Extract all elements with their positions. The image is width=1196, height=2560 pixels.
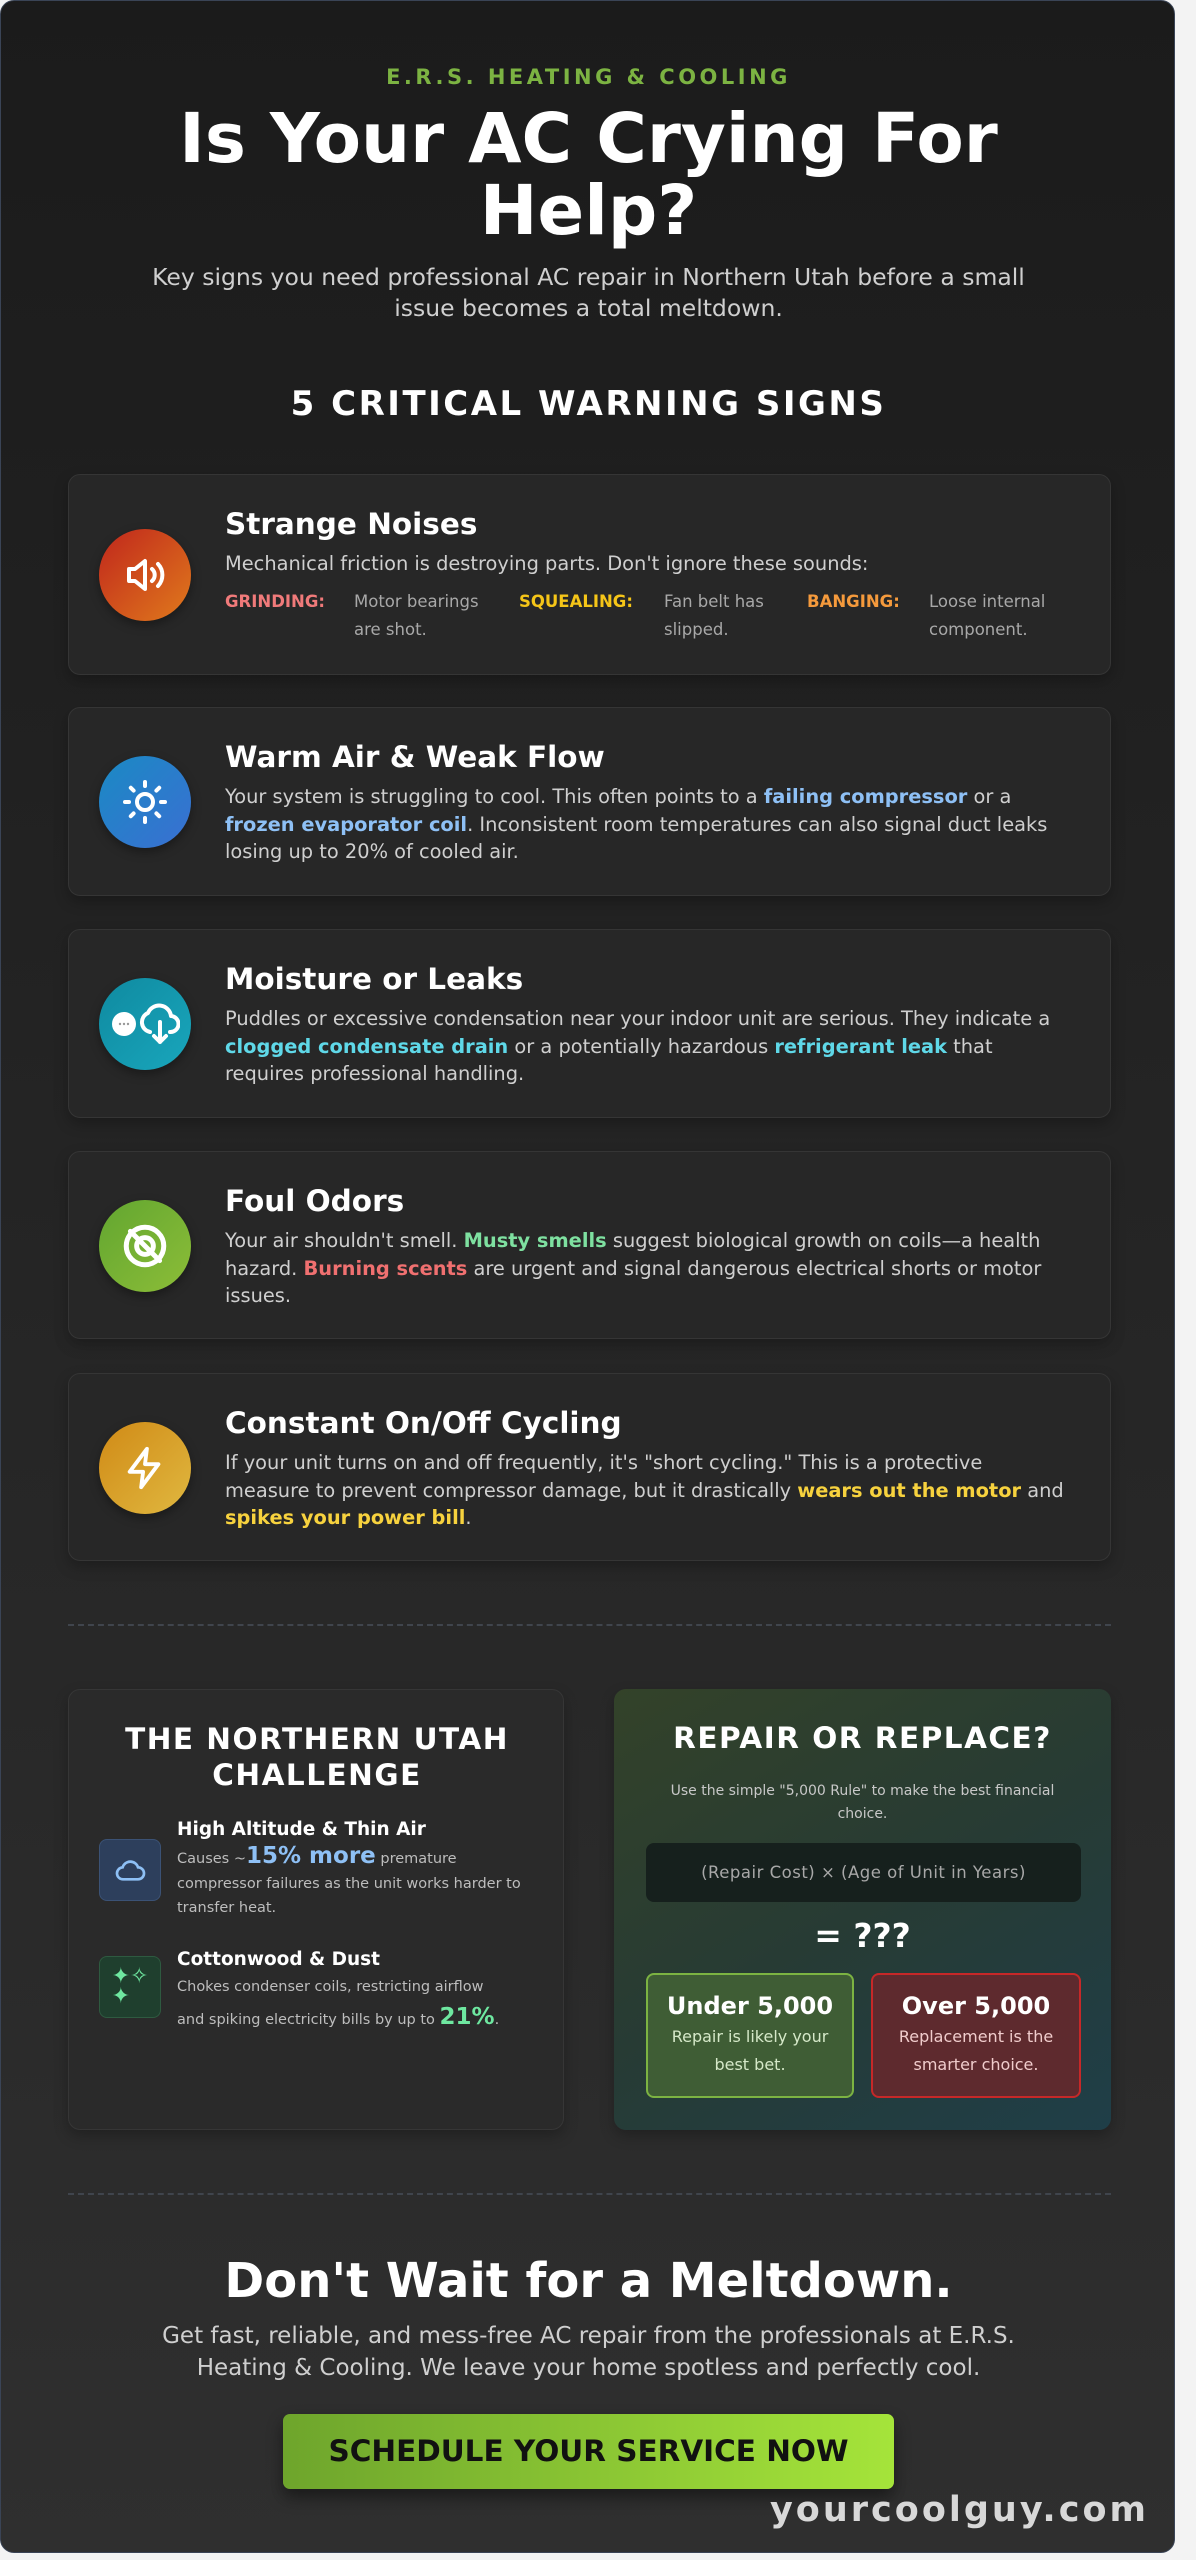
panel: foul odors: [68, 1151, 1111, 1339]
icon: drain: [99, 978, 191, 1070]
heading: REPAIR OR REPLACE?: [673, 1721, 1052, 1755]
text: [225, 1406, 1064, 1529]
panel: short cycling: [68, 1373, 1111, 1561]
CTA button: SCHEDULE YOUR SERVICE NOW: [328, 2434, 849, 2468]
CTA heading: Don't Wait for a Meltdown.: [224, 2253, 953, 2309]
website: yourcoolguy.com: [770, 2490, 1149, 2530]
icon: sun: [99, 756, 191, 848]
description: Use the simple "5,000 Rule" to make the best financial choice.: [671, 1783, 1054, 1822]
subtitle: Key signs you need professional AC repair in Northern Utah before a small issue becomes a total meltdown.: [152, 263, 1025, 322]
sound list: Fan belt has slipped.: [664, 592, 764, 639]
item: cottonwood: [99, 1949, 499, 2030]
text: [225, 962, 1050, 1085]
panel: moisture: [68, 929, 1111, 1118]
icon: cloud: [99, 1839, 161, 1901]
section heading: 5 CRITICAL WARNING SIGNS: [291, 384, 886, 424]
text: Warm Air & Weak Flow: [225, 740, 605, 774]
title: Is Your AC Crying For Help?: [179, 99, 998, 251]
text: Your system is struggling to cool. This often points to a failing compressor or a frozen evaporator coil. Inconsistent room temperatures can also signal duct leaks losing up to 20% of cooled air.: [225, 785, 1047, 863]
icon: lightning: [99, 1422, 191, 1514]
box: over: [871, 1973, 1081, 2098]
box: under: Under 5,000: [667, 1992, 833, 2020]
text: Foul Odors: [225, 1184, 404, 1218]
box: over: Over 5,000: [902, 1992, 1050, 2020]
sound list: SQUEALING:: [519, 592, 633, 611]
brand label: E.R.S. HEATING & COOLING: [386, 65, 791, 89]
panel: repair or replace: [614, 1689, 1111, 2130]
text: Mechanical friction is destroying parts. Don't ignore these sounds:: [225, 552, 868, 575]
sound list: Motor bearings are shot.: [354, 592, 479, 639]
item: cottonwood: Cottonwood & Dust: [177, 1949, 380, 1970]
icon: sparkles: ✦: [112, 1984, 130, 2009]
icon: sparkles: [99, 1956, 161, 2018]
item: cottonwood: Chokes condenser coils, restricting airflow and spiking electricity bills by up to 21%.: [177, 1979, 499, 2030]
panel: warm air: [68, 707, 1111, 896]
item: altitude: High Altitude & Thin Air: [177, 1819, 426, 1840]
text: [225, 740, 1047, 863]
heading: THE NORTHERN UTAH CHALLENGE: [125, 1722, 509, 1792]
item: altitude: Causes ~15% more premature compressor failures as the unit works harder to transfer heat.: [177, 1843, 521, 1916]
text: Constant On/Off Cycling: [225, 1406, 622, 1440]
item: altitude: [99, 1819, 521, 1916]
box: under: [646, 1973, 854, 2098]
text: Moisture or Leaks: [225, 962, 523, 996]
formula box: [646, 1843, 1081, 1902]
sound list: [225, 592, 1045, 639]
sound list: BANGING:: [807, 592, 900, 611]
icon: sparkles: ✦✧: [112, 1964, 148, 1989]
text: Strange Noises: [225, 507, 477, 541]
formula box: (Repair Cost) × (Age of Unit in Years): [701, 1863, 1026, 1882]
result: = ???: [814, 1916, 911, 1955]
panel: strange noises: [68, 474, 1111, 675]
text: Puddles or excessive condensation near your indoor unit are serious. They indicate a clogged condensate drain or a potentially hazardous refrigerant leak that requires professional handling.: [225, 1007, 1050, 1085]
box: under: Repair is likely your best bet.: [672, 2027, 828, 2074]
text: [225, 507, 868, 575]
sound list: Loose internal component.: [929, 592, 1045, 639]
sound list: GRINDING:: [225, 592, 325, 611]
text: If your unit turns on and off frequently, it's "short cycling." This is a protective measure to prevent compressor damage, but it drastically wears out the motor and spikes your power bill.: [225, 1451, 1064, 1529]
icon: no-smell: [99, 1200, 191, 1292]
icon: speaker: [99, 529, 191, 621]
CTA text: Get fast, reliable, and mess-free AC repair from the professionals at E.R.S. Heating & Cooling. We leave your home spotless and perfectly cool.: [162, 2323, 1015, 2381]
panel: northern utah challenge: [68, 1689, 564, 2130]
CTA button: [283, 2414, 894, 2489]
text: [225, 1184, 1042, 1307]
box: over: Replacement is the smarter choice.: [899, 2027, 1053, 2074]
text: Your air shouldn't smell. Musty smells suggest biological growth on coils—a health hazard. Burning scents are urgent and signal dangerous electrical shorts or motor issues.: [225, 1229, 1041, 1307]
